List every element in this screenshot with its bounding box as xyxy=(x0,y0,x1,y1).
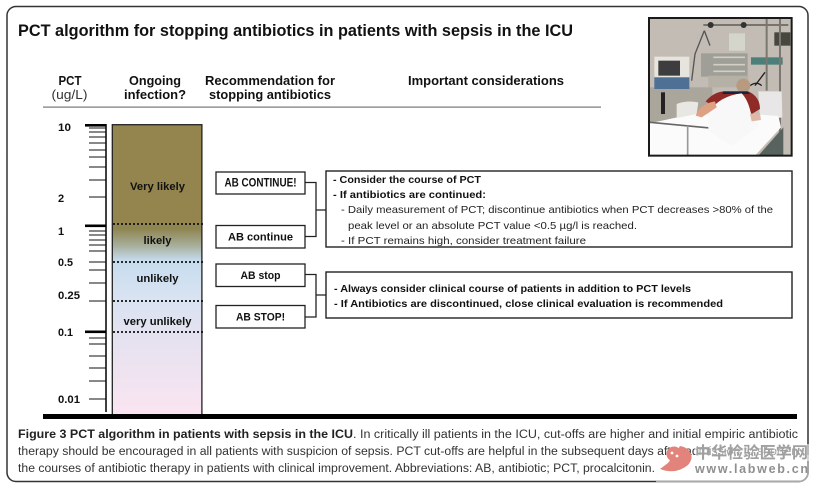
recommendation box: AB continue: AB continue xyxy=(228,232,293,244)
figure caption: the courses of antibiotic therapy in patients with clinical improvement. Abbreviations: AB, antibiotic; PCT, procalcitonin. xyxy=(18,463,655,475)
column header: PCT xyxy=(52,74,88,102)
considerations box: stop: - If Antibiotics are discontinued, close clinical evaluation is recommended xyxy=(334,298,723,310)
patient body xyxy=(696,78,761,130)
ongoing infection likelihood bar: very unlikely xyxy=(124,316,192,328)
PCT log scale axis: 0.5 xyxy=(58,257,73,269)
PCT log scale axis: 10 xyxy=(58,122,71,134)
ceiling rail and equipment xyxy=(692,18,790,144)
PCT log scale axis: 1 xyxy=(58,226,64,238)
recommendation box: AB STOP! xyxy=(216,306,305,328)
figure caption: Figure 3 PCT algorithm in patients with sepsis in the ICU xyxy=(18,429,353,441)
PCT log scale axis: 0.1 xyxy=(58,327,73,339)
considerations box: continue: - Consider the course of PCT xyxy=(333,174,482,186)
recommendation box: AB STOP!: AB STOP! xyxy=(236,312,285,324)
watermark logo and text xyxy=(660,443,818,476)
column header: ongoing infection xyxy=(124,74,186,102)
recommendation box: AB CONTINUE!: AB CONTINUE! xyxy=(224,178,296,190)
figure caption: . In critically ill patients in the ICU, cut-offs are higher and initial empiric antibiotic xyxy=(353,429,798,441)
column header: ongoing infection: Ongoing xyxy=(129,74,181,88)
recommendation box: AB CONTINUE! xyxy=(216,172,305,194)
column header: recommendation xyxy=(205,74,335,102)
ongoing infection likelihood bar xyxy=(112,125,205,415)
considerations box: continue: - If PCT remains high, consider treatment failure xyxy=(341,235,586,247)
column header: important considerations: Important considerations xyxy=(408,74,564,88)
bed sheet xyxy=(649,91,783,156)
photo: ICU patient in bed xyxy=(649,18,792,156)
PCT log scale axis xyxy=(58,122,107,412)
considerations box: continue: peak level or an absolute PCT value <0.5 µg/l is reached. xyxy=(348,220,637,232)
figure caption xyxy=(18,429,798,475)
connector: stop boxes to considerations xyxy=(305,274,326,317)
PCT log scale axis: 0.01 xyxy=(58,394,80,406)
ongoing infection likelihood bar: likely xyxy=(144,235,172,247)
PCT log scale axis: 2 xyxy=(58,193,64,205)
column header: recommendation: Recommendation for xyxy=(205,74,335,88)
considerations box: stop xyxy=(326,272,792,318)
column header: PCT: (ug/L) xyxy=(52,88,88,102)
recommendation box: AB stop xyxy=(216,264,305,286)
title: PCT algorithm for stopping antibiotics in patients with sepsis in the ICU xyxy=(18,21,573,40)
figure caption: therapy should be encouraged in all patients with suspicion of sepsis. PCT cut-offs are helpful in the subsequent days after admission to shorten xyxy=(18,446,798,458)
column header: PCT: PCT xyxy=(58,74,82,88)
connector: continue boxes to considerations xyxy=(305,182,326,236)
watermark logo and text: www.labweb.cn xyxy=(694,462,808,476)
watermark logo and text: 中华检验医学网 xyxy=(695,443,808,462)
recommendation box: AB stop: AB stop xyxy=(240,270,281,282)
considerations box: continue xyxy=(326,171,792,247)
ongoing infection likelihood bar: unlikely xyxy=(136,273,179,285)
considerations box: continue: - If antibiotics are continued: xyxy=(333,189,486,201)
column header: recommendation: stopping antibiotics xyxy=(209,88,331,102)
considerations box: continue: - Daily measurement of PCT; discontinue antibiotics when PCT decreases >80% of the xyxy=(341,204,773,216)
ongoing infection likelihood bar: Very likely xyxy=(130,181,186,193)
ventilator monitor xyxy=(654,57,689,114)
column header: ongoing infection: infection? xyxy=(124,88,186,102)
considerations box: stop: - Always consider clinical course of patients in addition to PCT levels xyxy=(334,283,691,295)
PCT log scale axis: 0.25 xyxy=(58,290,80,302)
recommendation box: AB continue xyxy=(216,226,305,248)
base line xyxy=(43,414,797,419)
